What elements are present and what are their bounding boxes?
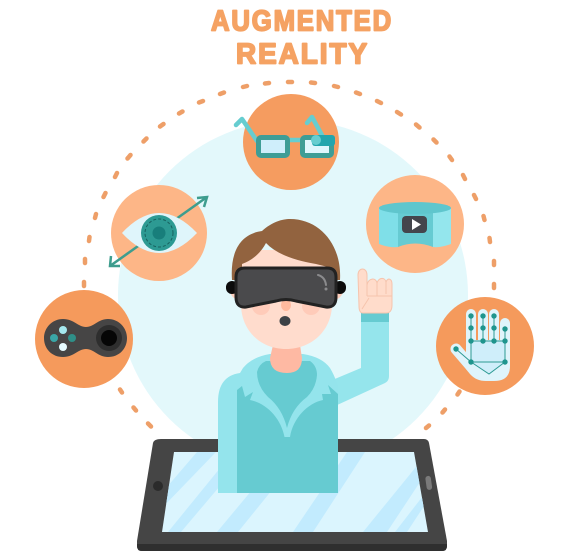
tablet [137,439,447,551]
title: REALITY [236,38,369,70]
icon: eye tracking [110,185,207,281]
title [211,6,393,70]
title: AUGMENTED [211,6,393,38]
hair [232,219,340,280]
ears and straps [226,280,346,300]
raised hand [358,269,392,313]
mouth [280,316,290,326]
VR goggles [236,268,336,307]
icon: panoramic screen [366,175,464,273]
icon: smart glasses [236,94,339,190]
icon: game controller [35,290,133,388]
person [218,219,392,493]
jacket [218,354,338,493]
cheeks [252,297,320,315]
icon: tracked hand [436,297,534,395]
dashed orbit [84,82,494,428]
neck [270,345,302,373]
raised arm [330,313,389,406]
background circle [118,120,468,470]
face [241,250,332,349]
nose [281,299,291,311]
